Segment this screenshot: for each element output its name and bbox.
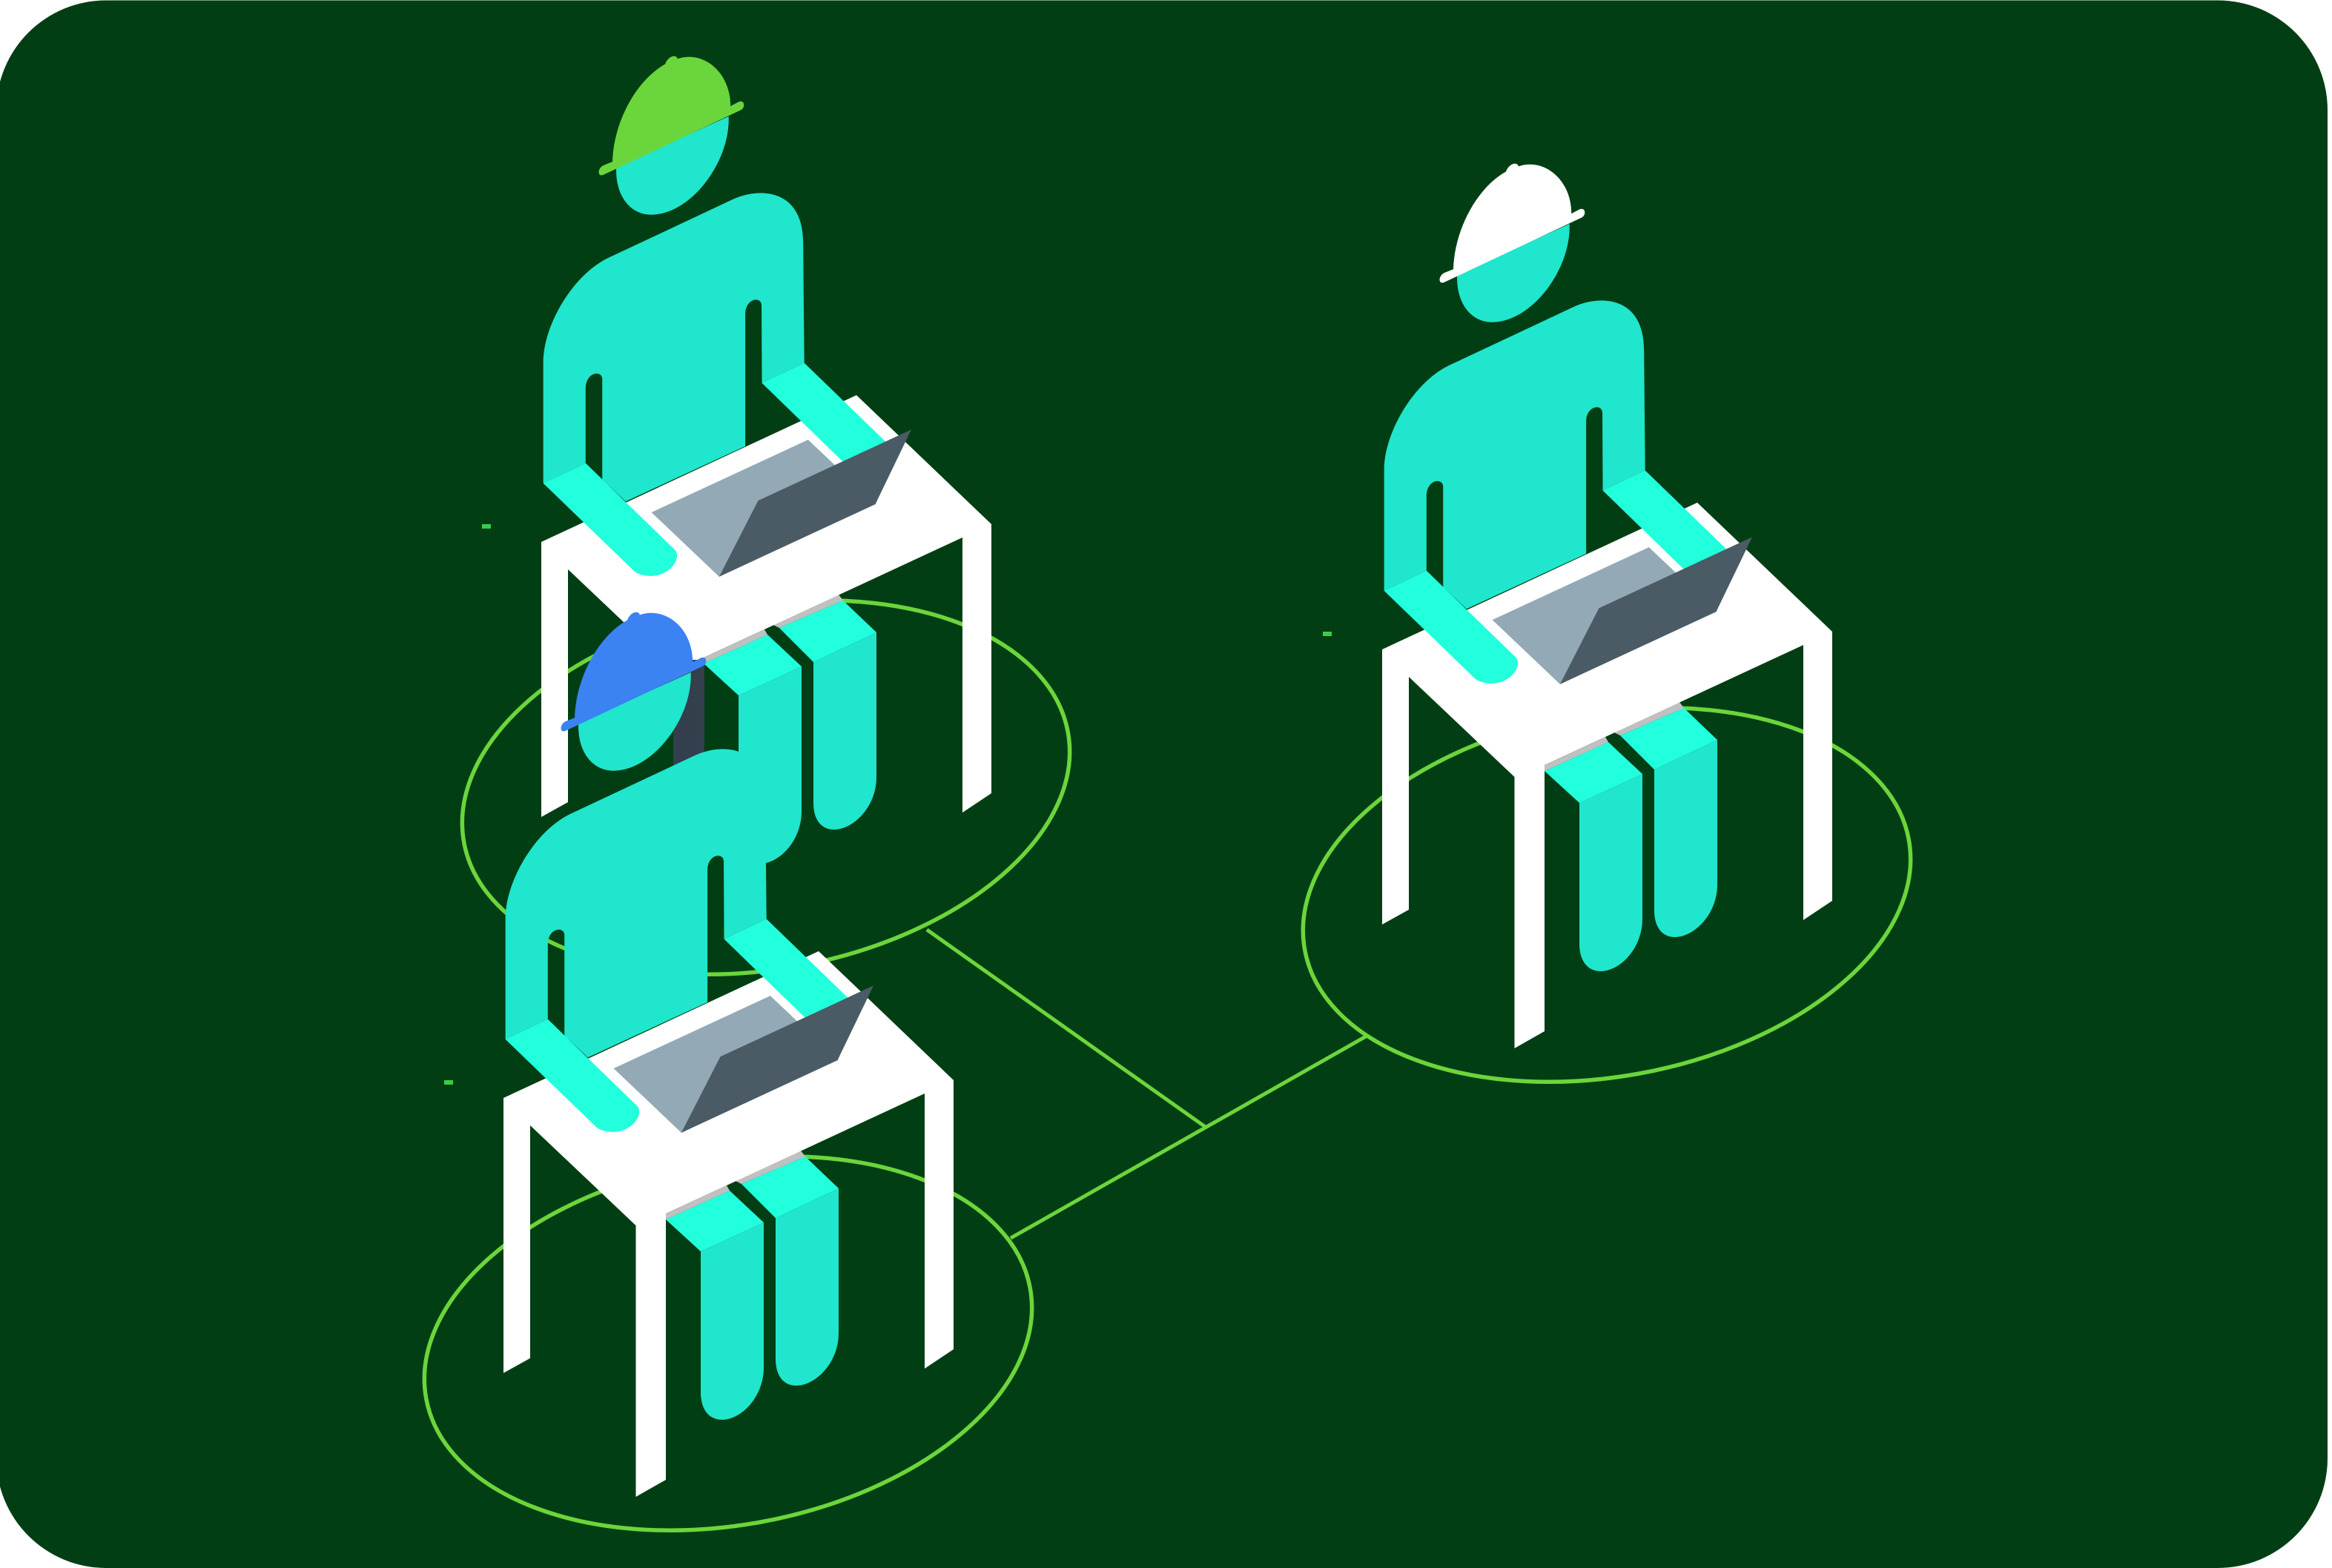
right arm	[1603, 471, 1726, 569]
left arm	[506, 1019, 639, 1132]
torso	[506, 749, 767, 1057]
left arm	[544, 463, 677, 576]
small dash	[444, 1080, 453, 1085]
upper body	[544, 56, 911, 577]
torso	[544, 193, 805, 501]
hat	[1440, 164, 1585, 282]
desk	[541, 395, 991, 941]
desk front leg in shadow	[673, 660, 704, 801]
connector lines	[927, 930, 1366, 1238]
laptop base	[1493, 547, 1717, 684]
ring	[394, 1110, 1063, 1568]
small dash	[1323, 632, 1332, 636]
figure: top worker with green hat	[432, 56, 1100, 1021]
ring	[432, 554, 1100, 1021]
ring	[1272, 661, 1941, 1128]
hat	[599, 56, 744, 175]
torso	[1384, 300, 1645, 609]
upper body	[506, 612, 873, 1133]
head	[578, 672, 691, 771]
figure: right worker with white hat	[1272, 164, 1941, 1128]
head	[616, 116, 729, 215]
laptop base	[614, 996, 839, 1133]
desk	[503, 951, 954, 1497]
legs	[701, 595, 876, 864]
legs	[663, 1151, 839, 1420]
laptop base	[652, 440, 876, 577]
head	[1457, 224, 1570, 322]
left arm	[1384, 571, 1518, 684]
laptop screen	[681, 985, 873, 1133]
laptop screen	[719, 429, 911, 577]
desk	[1382, 503, 1832, 1048]
figure: bottom worker with blue hat	[394, 612, 1063, 1568]
hat	[561, 612, 706, 731]
legs	[1542, 702, 1717, 971]
right arm	[724, 919, 848, 1018]
upper body	[1384, 164, 1752, 684]
right arm	[762, 363, 885, 462]
small dash	[482, 524, 491, 529]
laptop screen	[1560, 537, 1752, 684]
